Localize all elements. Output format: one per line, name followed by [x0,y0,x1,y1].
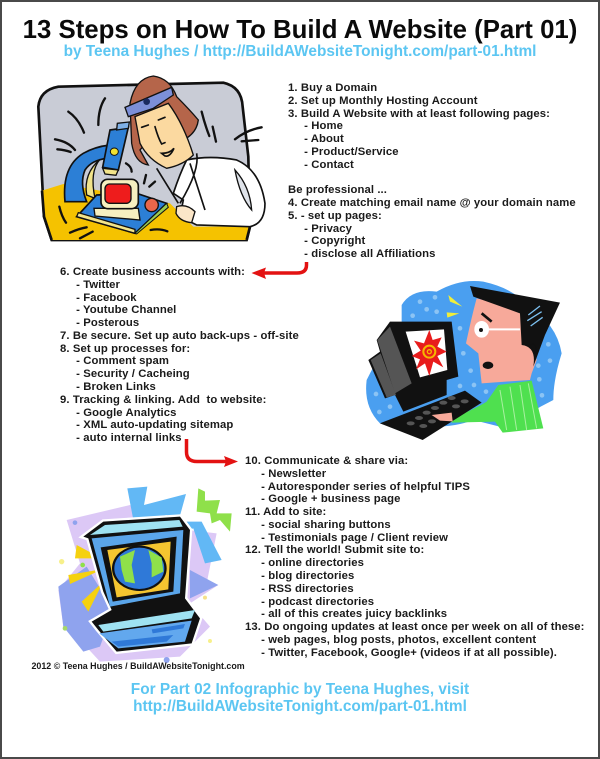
microscope [65,145,110,202]
subtitle byline: by Teena Hughes / http://BuildAWebsiteTonight.com/part-01.html [64,43,536,60]
step list: 6 to 9: 6. Create business accounts with: - Twitter - Facebook - Youtube Channel - Posterous 7. Be secure. Set up auto back-ups - off-site 8. Set up processes for: - Comment spam - Security / Cacheing - Broken Links 9. Tracking & linking. Add to website: - Google Analytics - XML auto-updating sitemap - auto internal links [60,266,299,444]
title: 13 Steps on How To Build A Website (Part 01) [23,16,577,44]
footer call to action: For Part 02 Infographic by Teena Hughes, visit http://BuildAWebsiteTonight.com/part-01.html [131,680,469,715]
scientist [173,157,265,227]
computer [83,517,200,652]
monitor [368,322,458,412]
sweater [452,381,543,433]
keyboard [380,391,482,440]
copyright note: 2012 © Teena Hughes / BuildAWebsiteTonight.com [32,661,245,671]
step list: 1 to 5: 1. Buy a Domain 2. Set up Monthly Hosting Account 3. Build A Website with at least following pages: - Home - About - Product/Service - Contact Be professional ... 4. Create matching email name @ your domain name 5. - set up pages: - Privacy - Copyright - disclose all Affiliations [288,82,576,260]
face [466,298,537,383]
step list: 10 to 13: 10. Communicate & share via: - Newsletter - Autoresponder series of helpful TIPS - Google + business page 11. Add to site: - social sharing buttons - Testimonials page / Client review 12. Tell the world! Submit site to: - online directories - blog directories - RSS directories - podcast directories - all of this creates juicy backlinks 13. Do ongoing updates at least once per week on all of these: - web pages, blog posts, photos, excellent content - Twitter, Facebook, Google+ (videos if at all possible). [245,455,585,659]
